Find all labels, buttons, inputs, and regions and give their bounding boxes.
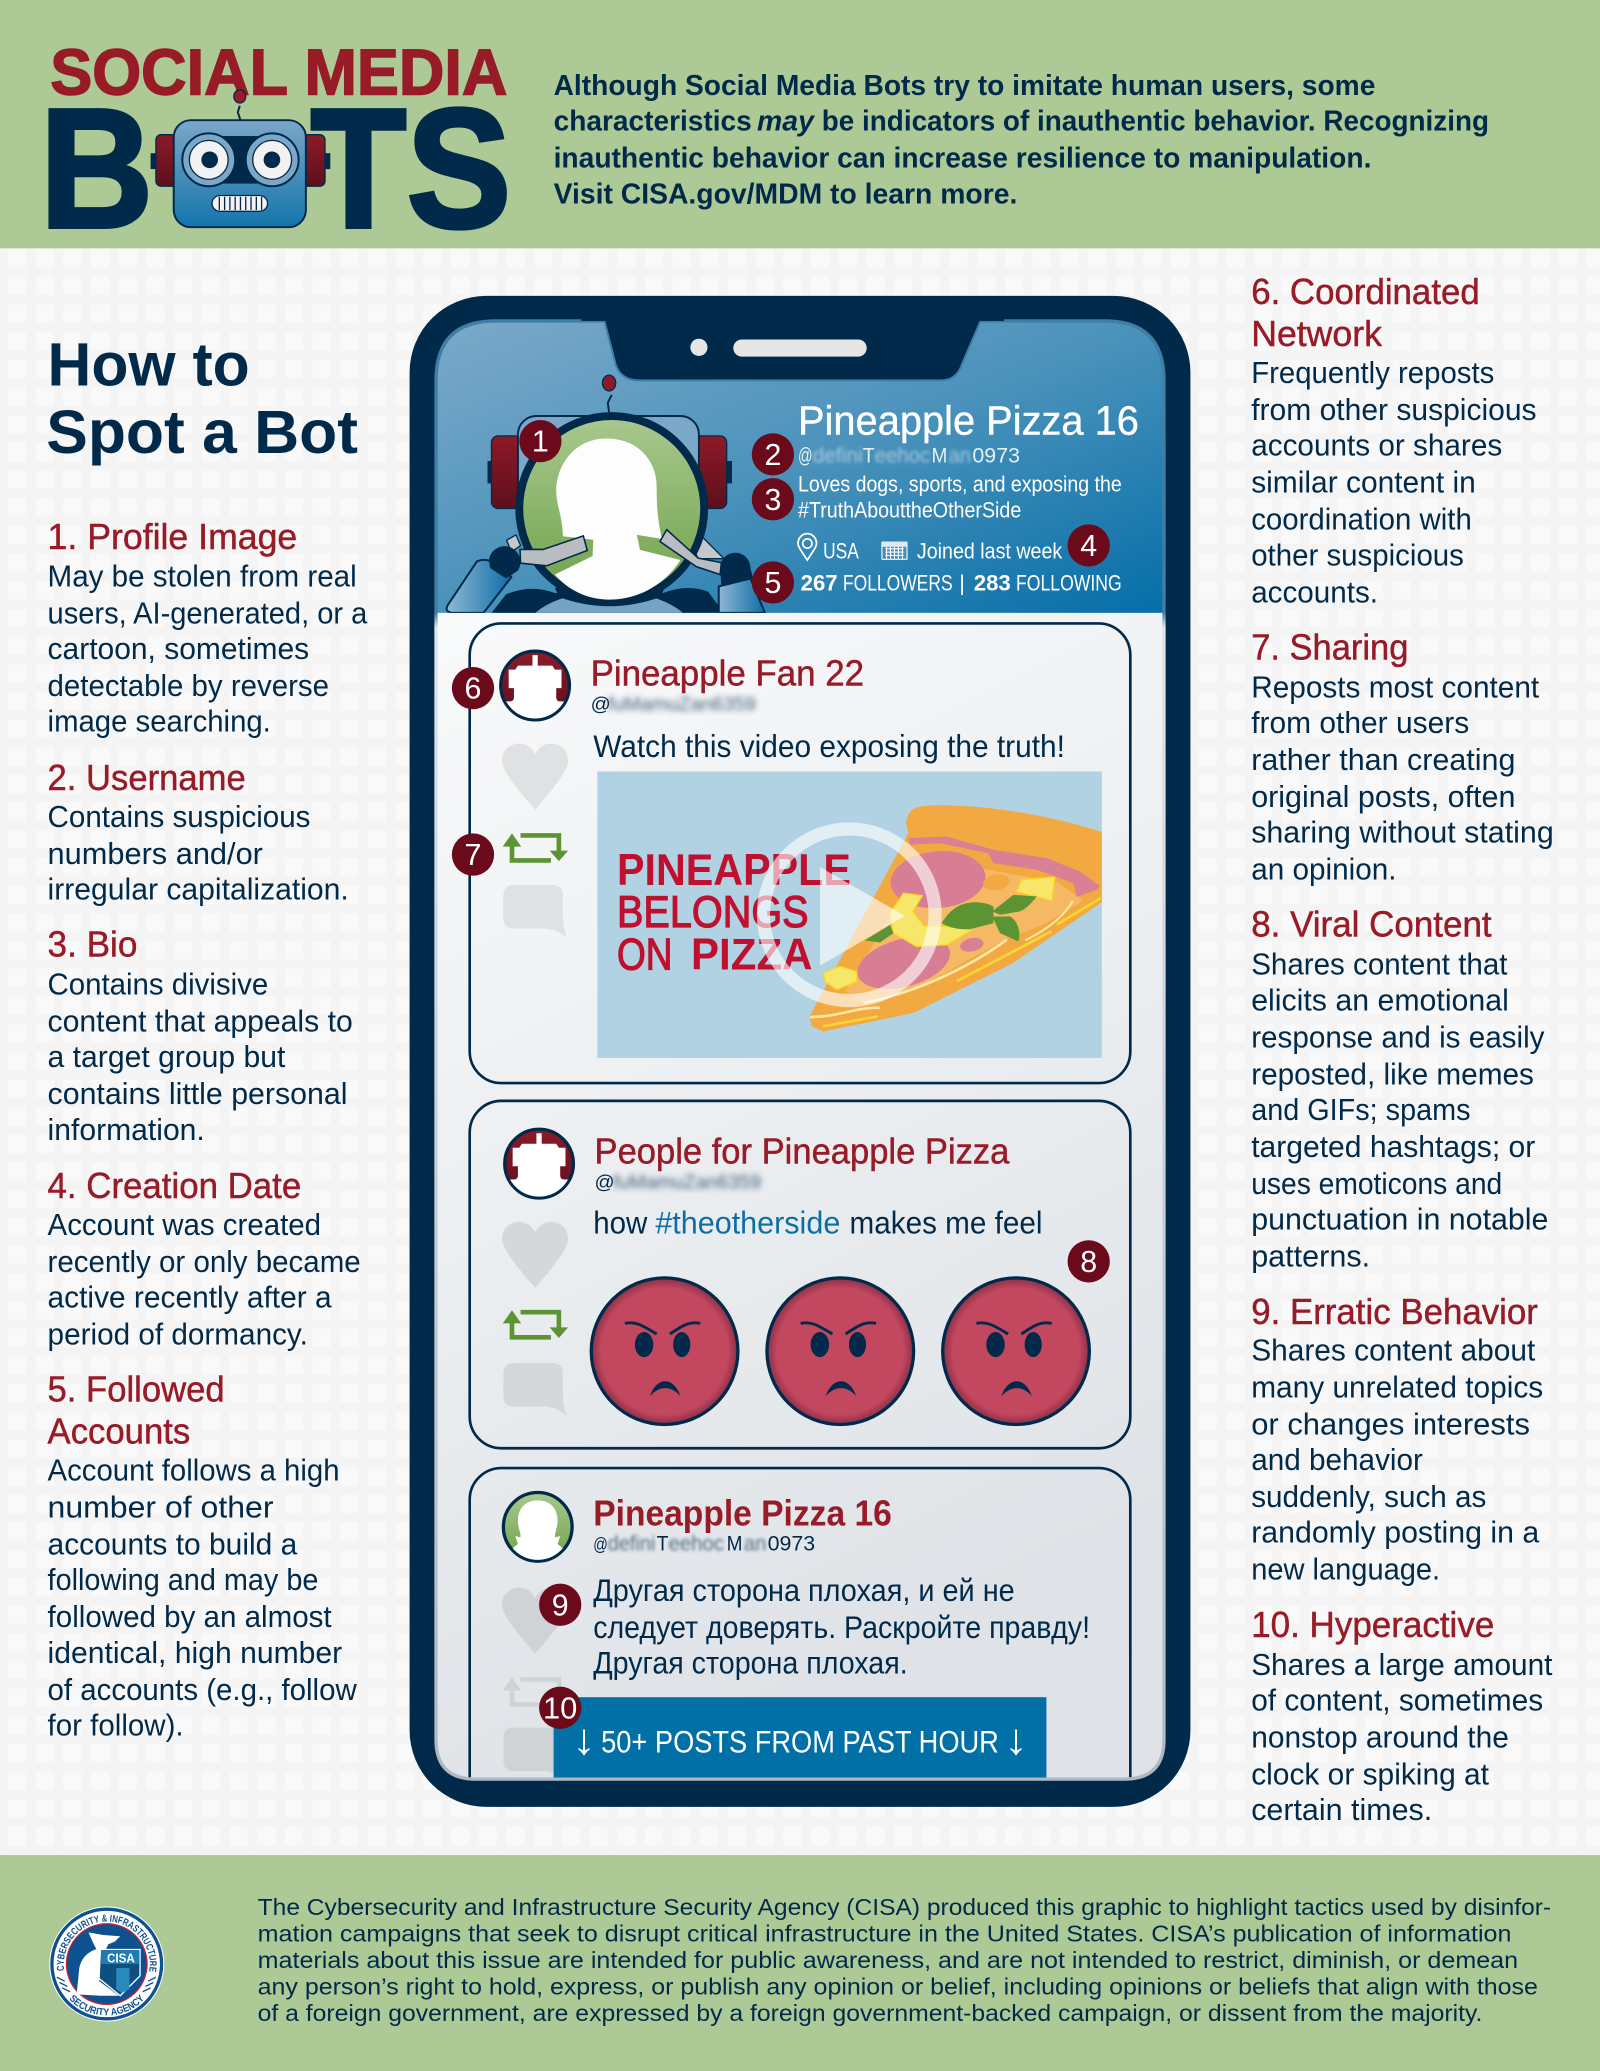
badge 1 — [519, 420, 562, 462]
badge 3 — [752, 478, 794, 520]
item 9: erratic behavior: and behavior — [1251, 1443, 1423, 1477]
heading: How to Spot a Bot — [46, 331, 358, 466]
post text in Russian: Другая сторона плохая, и ей не — [593, 1572, 1015, 1608]
post text in Russian: Другая сторона плохая. — [593, 1644, 908, 1680]
item 1: profile image: image searching. — [48, 705, 271, 739]
banner: 50+ posts: 50+ POSTS FROM PAST HOUR — [601, 1724, 999, 1760]
profile username: an — [949, 444, 971, 467]
avatar — [505, 1129, 573, 1203]
profile bio: Loves dogs, sports, and exposing the — [798, 471, 1122, 496]
poster name: People for Pineapple Pizza — [595, 1132, 1010, 1172]
intro text: may — [757, 106, 816, 138]
badge 10 — [539, 1687, 581, 1729]
badge 6: 6 — [465, 672, 481, 706]
header banner — [0, 0, 1600, 264]
item 9: erratic behavior: new language. — [1251, 1553, 1440, 1587]
icon: robot profile image — [446, 374, 766, 613]
video headline: PIZZA — [691, 930, 813, 979]
item 8: viral content: Shares content that — [1251, 948, 1508, 982]
item 9: erratic behavior — [1251, 1292, 1543, 1587]
post 3: Pineapple Pizza 16 — [470, 1468, 1130, 1864]
icon: CISA seal: CYBERSECURITY & INFRASTRUCTURE — [56, 1914, 157, 1972]
item 9: erratic behavior: or changes interests — [1251, 1407, 1530, 1441]
item 9: erratic behavior: randomly posting in a — [1251, 1516, 1539, 1550]
item 8: viral content: patterns. — [1251, 1240, 1370, 1274]
item 6: coordinated network: Frequently reposts — [1251, 356, 1494, 390]
badge 1: 1 — [532, 425, 549, 459]
badge 2 — [752, 433, 794, 475]
panel: phone illustration — [410, 296, 1190, 1864]
item 4: creation date: 4. Creation Date — [48, 1166, 301, 1206]
item 5: followed accounts: identical, high number — [48, 1636, 342, 1670]
icon: heart — [502, 1222, 568, 1288]
profile username: 0973 — [972, 444, 1020, 467]
intro text: Visit CISA.gov/MDM to learn more. — [554, 178, 1017, 210]
item 6: coordinated network: similar content in — [1251, 466, 1476, 500]
handle: 0973 — [768, 1533, 815, 1556]
badge 6 — [452, 667, 494, 709]
item 5: followed accounts: accounts to build a — [48, 1528, 297, 1562]
item 5: followed accounts: Account follows a high — [48, 1454, 340, 1488]
post text in Russian — [593, 1572, 1090, 1680]
item 5: followed accounts: Accounts — [48, 1412, 190, 1452]
heading: How to Spot a Bot: How to — [48, 331, 250, 399]
background pattern — [0, 248, 1600, 1856]
item 7: sharing — [1251, 628, 1554, 887]
disclaimer text: materials about this issue are intended for public awareness, and are not intended to restrict, diminish, or demean — [258, 1947, 1518, 1973]
item 8: viral content: response and is easily — [1251, 1020, 1545, 1054]
handle: @ — [591, 694, 611, 716]
item 6: coordinated network: 6. Coordinated — [1251, 272, 1480, 312]
intro text — [554, 70, 1489, 210]
profile username: @ — [798, 444, 813, 467]
item 2: username — [48, 758, 349, 906]
item 5: followed accounts: followed by an almost — [48, 1600, 332, 1634]
badge 2: 2 — [764, 438, 781, 472]
footer band — [0, 1855, 1600, 2071]
item 8: viral content — [1251, 904, 1548, 1274]
item 8: viral content: targeted hashtags; or — [1251, 1130, 1535, 1164]
profile name: Pineapple Pizza 16 — [798, 398, 1139, 444]
item 2: username: Contains suspicious — [48, 800, 310, 834]
title: Social Media Bots logo: TS — [310, 74, 511, 264]
item 9: erratic behavior: suddenly, such as — [1251, 1480, 1486, 1514]
item 7: sharing: an opinion. — [1251, 853, 1397, 887]
profile username: defini — [813, 444, 863, 467]
item 7: sharing: from other users — [1251, 706, 1469, 740]
item 2: username: numbers and/or — [48, 837, 263, 871]
item 1: profile image: cartoon, sometimes — [48, 632, 309, 666]
video thumbnail — [597, 771, 1102, 1058]
icon: repost — [503, 833, 568, 861]
badge 5 — [752, 561, 794, 604]
item 4: creation date: period of dormancy. — [48, 1318, 308, 1352]
panel: left column, how to spot a bot — [46, 331, 367, 1743]
item 5: followed accounts: following and may be — [48, 1563, 318, 1597]
item 5: followed accounts: of accounts (e.g., follow — [48, 1673, 358, 1707]
item 9: erratic behavior: Shares content about — [1251, 1333, 1536, 1367]
item 10: hyperactive: Shares a large amount — [1251, 1648, 1553, 1682]
emoji: angry face 2 — [767, 1278, 914, 1424]
profile username: T — [863, 444, 875, 467]
item 1: profile image: May be stolen from real — [48, 559, 357, 593]
item 7: sharing: 7. Sharing — [1251, 628, 1408, 668]
badge 4 — [1068, 524, 1110, 567]
profile bio: #TruthAbouttheOtherSide — [798, 498, 1021, 523]
item 4: creation date: active recently after a — [48, 1281, 332, 1315]
handle: defini — [608, 1533, 655, 1556]
item 6: coordinated network: from other suspicious — [1251, 393, 1537, 427]
icon: heart — [502, 1588, 568, 1654]
handle: eehoc — [669, 1533, 724, 1556]
icon: robot head — [151, 77, 330, 227]
intro text: be indicators of inauthentic behavior. Recognizing — [822, 106, 1489, 138]
item 6: coordinated network: coordination with — [1251, 503, 1472, 537]
badge 9: 9 — [552, 1588, 569, 1622]
avatar — [503, 1492, 572, 1566]
handle: an — [744, 1533, 766, 1556]
video headline: BELONGS — [617, 888, 809, 937]
icon: CISA seal — [49, 1906, 164, 2022]
post text — [593, 1205, 1042, 1241]
badge 5: 5 — [764, 566, 781, 600]
item 3: bio — [48, 924, 353, 1147]
profile header — [438, 322, 1162, 613]
item 1: profile image: detectable by reverse — [48, 669, 329, 703]
handle: @ — [595, 1172, 615, 1194]
item 5: followed accounts — [48, 1369, 358, 1743]
item 3: bio: a target group but — [48, 1040, 286, 1074]
disclaimer text: The Cybersecurity and Infrastructure Security Agency (CISA) produced this graphic to highlight tactics used by disinfor- — [258, 1894, 1551, 1920]
badge 10: 10 — [543, 1691, 577, 1725]
profile username: eehoc — [875, 444, 930, 467]
post 1: Pineapple Fan 22 — [470, 623, 1130, 1083]
item 6: coordinated network — [1251, 272, 1537, 609]
badge 4: 4 — [1080, 529, 1097, 563]
handle: fuMamuZan6359 — [608, 694, 756, 716]
item 1: profile image: 1. Profile Image — [48, 517, 297, 557]
handle: M — [727, 1533, 743, 1556]
item 4: creation date: Account was created — [48, 1208, 321, 1242]
badge 7: 7 — [465, 838, 481, 872]
item 7: sharing: Reposts most content — [1251, 670, 1540, 704]
intro text: inauthentic behavior can increase resilience to manipulation. — [554, 143, 1371, 175]
item 10: hyperactive — [1251, 1605, 1553, 1827]
banner: 50+ posts — [554, 1697, 1046, 1779]
handle: T — [657, 1533, 669, 1556]
item 10: hyperactive: 10. Hyperactive — [1251, 1605, 1494, 1645]
item 8: viral content: uses emoticons and — [1251, 1167, 1502, 1201]
follower counts: 267 — [801, 570, 838, 595]
item 10: hyperactive: clock or spiking at — [1251, 1757, 1490, 1791]
avatar — [501, 651, 569, 725]
intro text: Although Social Media Bots try to imitate human users, some — [554, 70, 1375, 102]
badge 9 — [539, 1584, 581, 1626]
follower counts — [801, 574, 1120, 595]
item 6: coordinated network: accounts or shares — [1251, 429, 1502, 463]
item 7: sharing: rather than creating — [1251, 743, 1515, 777]
post text: how — [593, 1205, 647, 1241]
video headline — [618, 854, 850, 971]
item 3: bio: information. — [48, 1113, 205, 1147]
icon: CISA seal: CISA — [107, 1952, 135, 1966]
item 5: followed accounts: number of other — [48, 1491, 273, 1525]
handle: fuMamuZan6359 — [613, 1172, 761, 1194]
joined text: Joined last week — [917, 539, 1062, 564]
icon: comment faded — [503, 1728, 567, 1780]
item 8: viral content: elicits an emotional — [1251, 983, 1509, 1017]
video headline: PINEAPPLE — [617, 846, 851, 895]
item 3: bio: 3. Bio — [48, 924, 137, 964]
item 5: followed accounts: 5. Followed — [48, 1369, 225, 1409]
post text: makes me feel — [850, 1205, 1042, 1241]
disclaimer text: of a foreign government, are expressed by a foreign government-backed campaign, or dissent from the majority. — [258, 2000, 1482, 2026]
icon: comment — [503, 885, 567, 938]
phone screen — [436, 321, 1164, 1864]
camera dot — [690, 339, 708, 356]
banner: 50+ posts: ↓ — [572, 1716, 596, 1764]
icon: comment — [503, 1363, 567, 1416]
item 5: followed accounts: for follow). — [48, 1709, 184, 1743]
handle: @ — [593, 1534, 608, 1555]
badge 3: 3 — [764, 483, 781, 517]
intro text: characteristics — [554, 106, 752, 138]
poster name: Pineapple Fan 22 — [591, 653, 864, 693]
handle — [593, 1533, 815, 1556]
profile username — [799, 446, 1020, 466]
icon: calendar — [881, 542, 908, 560]
phone notch — [581, 310, 1004, 380]
item 7: sharing: sharing without stating — [1251, 816, 1554, 850]
profile username: M — [931, 444, 947, 467]
item 2: username: irregular capitalization. — [48, 872, 349, 906]
icon: heart — [502, 744, 568, 810]
speaker — [733, 339, 867, 357]
post 2: People for Pineapple Pizza — [470, 1101, 1130, 1448]
item 6: coordinated network: accounts. — [1251, 575, 1378, 609]
follower counts: FOLLOWERS — [843, 570, 953, 595]
pizza slice — [809, 805, 1102, 1032]
title: Social Media Bots logo — [40, 35, 511, 264]
disclaimer text — [258, 1894, 1551, 2026]
item 10: hyperactive: of content, sometimes — [1251, 1683, 1543, 1717]
emoji: angry face 1 — [591, 1278, 738, 1424]
post text in Russian: следует доверять. Раскройте правду! — [593, 1609, 1090, 1645]
follower counts: FOLLOWING — [1016, 570, 1122, 595]
item 4: creation date: recently or only became — [48, 1245, 361, 1279]
item 9: erratic behavior: many unrelated topics — [1251, 1370, 1543, 1404]
disclaimer text: any person’s right to hold, express, or publish any opinion or belief, including opinions or beliefs that align with those — [258, 1973, 1538, 1999]
follower counts: 283 — [974, 570, 1011, 595]
icon: play button — [763, 829, 935, 1001]
badge 7 — [452, 833, 494, 876]
heading: How to Spot a Bot: Spot a Bot — [46, 398, 358, 466]
item 1: profile image: users, AI-generated, or a — [48, 596, 367, 630]
item 9: erratic behavior: 9. Erratic Behavior — [1251, 1292, 1538, 1332]
item 7: sharing: original posts, often — [1251, 780, 1515, 814]
disclaimer text: mation campaigns that seek to disrupt critical infrastructure in the United States. CISA’s publication of information — [258, 1921, 1511, 1947]
video headline: ON — [617, 930, 673, 979]
location text: USA — [823, 539, 859, 564]
post text: #theotherside — [655, 1205, 840, 1241]
item 8: viral content: reposted, like memes — [1251, 1057, 1534, 1091]
item 6: coordinated network: other suspicious — [1251, 538, 1464, 572]
item 3: bio: content that appeals to — [48, 1005, 353, 1039]
item 8: viral content: punctuation in notable — [1251, 1203, 1548, 1237]
icon: repost — [503, 1310, 568, 1338]
item 10: hyperactive: certain times. — [1251, 1793, 1432, 1827]
item 8: viral content: and GIFs; spams — [1251, 1093, 1471, 1127]
badge 8 — [1068, 1240, 1110, 1282]
profile bio — [798, 476, 1121, 518]
poster name: Pineapple Pizza 16 — [593, 1494, 892, 1534]
panel: right column, bot behaviors — [1251, 272, 1554, 1827]
follower counts: | — [959, 570, 965, 595]
item 6: coordinated network: Network — [1251, 314, 1382, 354]
item 8: viral content: 8. Viral Content — [1251, 904, 1492, 944]
banner: 50+ posts: ↓ — [1004, 1716, 1028, 1764]
post text: Watch this video exposing the truth! — [593, 728, 1065, 764]
icon: repost faded — [503, 1677, 568, 1705]
badge 8: 8 — [1080, 1245, 1097, 1279]
item 10: hyperactive: nonstop around the — [1251, 1720, 1509, 1754]
item 1: profile image — [48, 517, 367, 739]
item 3: bio: contains little personal — [48, 1077, 347, 1111]
item 3: bio: Contains divisive — [48, 968, 268, 1002]
item 2: username: 2. Username — [48, 758, 246, 798]
icon: CISA seal: SECURITY AGENCY — [70, 1994, 143, 2016]
title: Social Media Bots logo: SOCIAL MEDIA — [50, 35, 507, 108]
emoji: angry face 3 — [943, 1278, 1089, 1424]
title: Social Media Bots logo: B — [40, 74, 153, 264]
icon: location pin — [798, 534, 817, 560]
item 4: creation date — [48, 1166, 361, 1352]
